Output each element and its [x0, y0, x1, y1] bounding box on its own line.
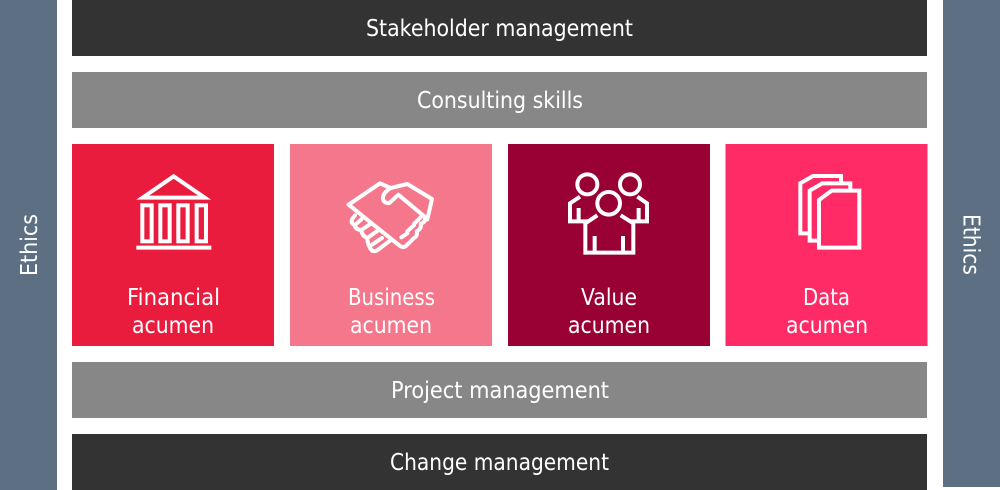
icon: handshake — [349, 183, 432, 251]
panel: Financial acumen — [72, 144, 274, 346]
panel: Business acumen — [290, 144, 492, 346]
panel: Value acumen — [508, 144, 710, 346]
icon: stacked documents — [800, 176, 859, 248]
label: Value acumen: acumen — [568, 313, 650, 339]
bar: Consulting skills: Consulting skills — [417, 88, 583, 114]
label: Financial acumen: acumen — [132, 313, 214, 339]
icon: bank building — [136, 176, 211, 248]
label: Business acumen — [348, 285, 435, 339]
bar: Stakeholder management: Stakeholder management — [366, 16, 633, 42]
bar: Project management — [72, 362, 927, 418]
icon: group of people — [570, 174, 647, 253]
bar: Change management: Change management — [390, 450, 609, 476]
right side bar: Ethics: Ethics — [958, 214, 984, 275]
label: Value acumen — [568, 285, 650, 339]
bar: Stakeholder management — [72, 0, 927, 56]
bar: Project management: Project management — [391, 378, 609, 404]
label: Business acumen: Business — [348, 285, 435, 311]
label: Financial acumen — [127, 285, 220, 339]
right side bar: Ethics — [943, 0, 1000, 487]
label: Data acumen: Data — [803, 285, 850, 311]
label: Data acumen — [786, 285, 868, 339]
label: Value acumen: Value — [581, 285, 637, 311]
left side bar: Ethics — [0, 0, 57, 490]
bar: Consulting skills — [72, 72, 927, 128]
label: Data acumen: acumen — [786, 313, 868, 339]
label: Business acumen: acumen — [350, 313, 432, 339]
label: Financial acumen: Financial — [127, 285, 220, 311]
panel: Data acumen — [726, 144, 928, 346]
bar: Change management — [72, 434, 927, 490]
left side bar: Ethics: Ethics — [17, 214, 43, 276]
